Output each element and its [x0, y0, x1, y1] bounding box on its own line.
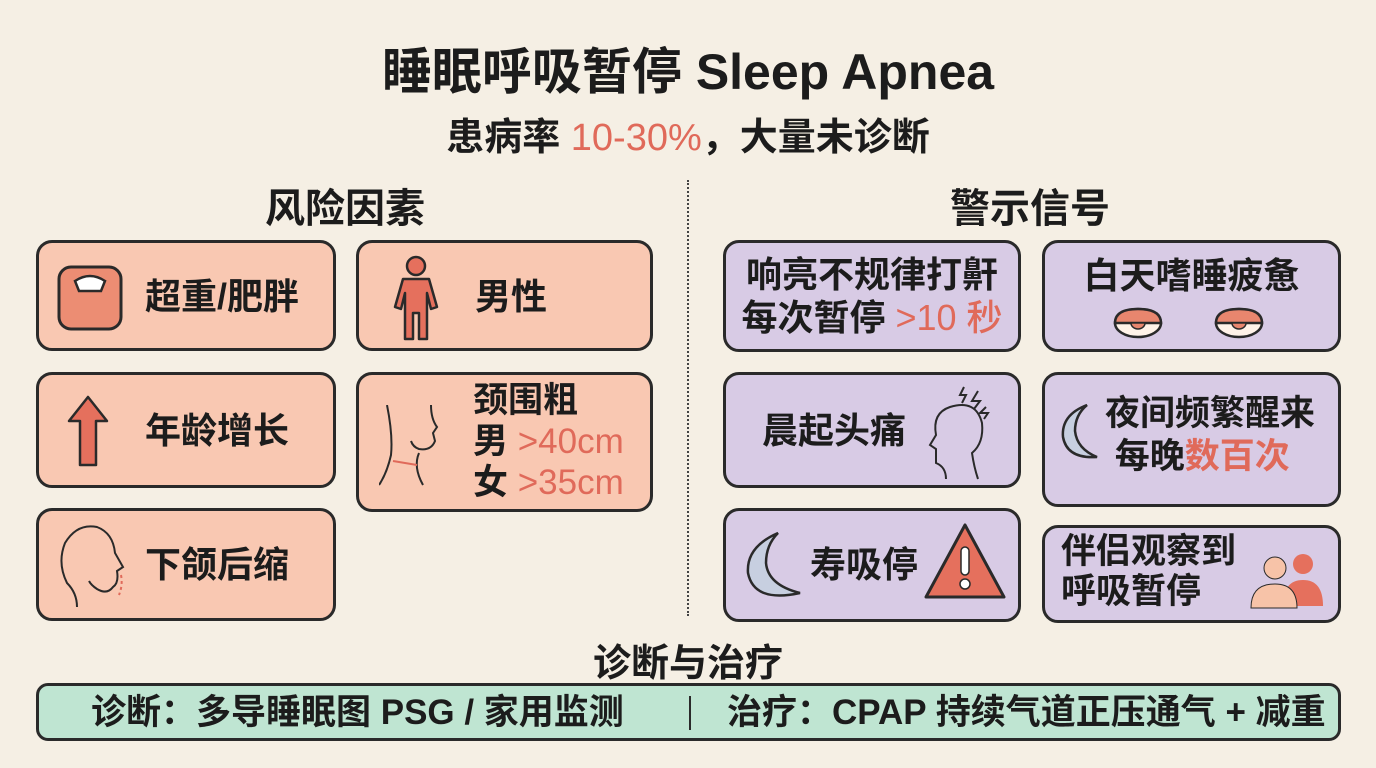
text — [1061, 532, 1236, 611]
icon: two people — [1250, 554, 1323, 608]
text: 伴侣观察到 — [1061, 532, 1236, 571]
icon: head with pain — [928, 386, 990, 480]
icon: moon — [1062, 404, 1098, 458]
subtitle: 患病率 10-30%，大量未诊断 — [446, 117, 930, 159]
panel: morning headache — [723, 372, 1021, 488]
bottom bar — [36, 683, 1341, 741]
text — [741, 254, 1003, 338]
panel: snoring — [723, 240, 1021, 352]
panel: apnea during sleep — [723, 508, 1021, 622]
text: 年龄增长 — [145, 410, 289, 451]
text: treatment: 治疗：CPAP 持续气道正压通气 + 减重 — [727, 693, 1326, 732]
text — [1105, 394, 1315, 476]
icon: up arrow — [68, 396, 108, 466]
text: 白天嗜睡疲惫 — [1083, 255, 1300, 296]
panel: partner observed — [1042, 525, 1341, 623]
icon: moon — [746, 532, 800, 597]
text: 超重/肥胖 — [145, 276, 299, 317]
panel: night awakenings — [1042, 372, 1341, 507]
text: 呼吸暂停 — [1061, 572, 1201, 611]
text: 女 >35cm — [473, 463, 624, 502]
icon: head — [60, 525, 124, 607]
icon: scale — [58, 266, 122, 330]
panel: daytime sleepiness — [1042, 240, 1341, 352]
icon: person — [394, 256, 438, 340]
text: 下颌后缩 — [145, 544, 289, 585]
panel: male — [356, 240, 653, 351]
panel: jaw — [36, 508, 336, 621]
text: 晨起头痛 — [762, 410, 906, 451]
heading: diagnosis & treatment: 诊断与治疗 — [593, 643, 783, 685]
icon: tired eyes — [1114, 308, 1264, 338]
text: 男 >40cm — [473, 422, 624, 461]
text: 寿吸停 — [810, 544, 918, 585]
separator — [689, 696, 691, 730]
heading: risk factors: 风险因素 — [265, 187, 425, 231]
text: 每晚数百次 — [1115, 437, 1290, 476]
icon: warning — [924, 523, 1006, 598]
text — [473, 381, 624, 502]
panel: neck — [356, 372, 653, 512]
divider — [687, 180, 689, 616]
title: 睡眠呼吸暂停 Sleep Apnea — [382, 44, 994, 100]
text: 颈围粗 — [473, 381, 578, 420]
text: 每次暂停 >10 秒 — [741, 297, 1003, 338]
icon: neck profile — [379, 405, 438, 486]
heading: warning signs: 警示信号 — [950, 187, 1110, 231]
panel: age — [36, 372, 336, 488]
text: diagnosis: 诊断：多导睡眠图 PSG / 家用监测 — [91, 693, 624, 732]
text: 夜间频繁醒来 — [1105, 394, 1315, 433]
text: 男性 — [475, 276, 547, 317]
text: 响亮不规律打鼾 — [746, 254, 998, 295]
panel: overweight — [36, 240, 336, 351]
